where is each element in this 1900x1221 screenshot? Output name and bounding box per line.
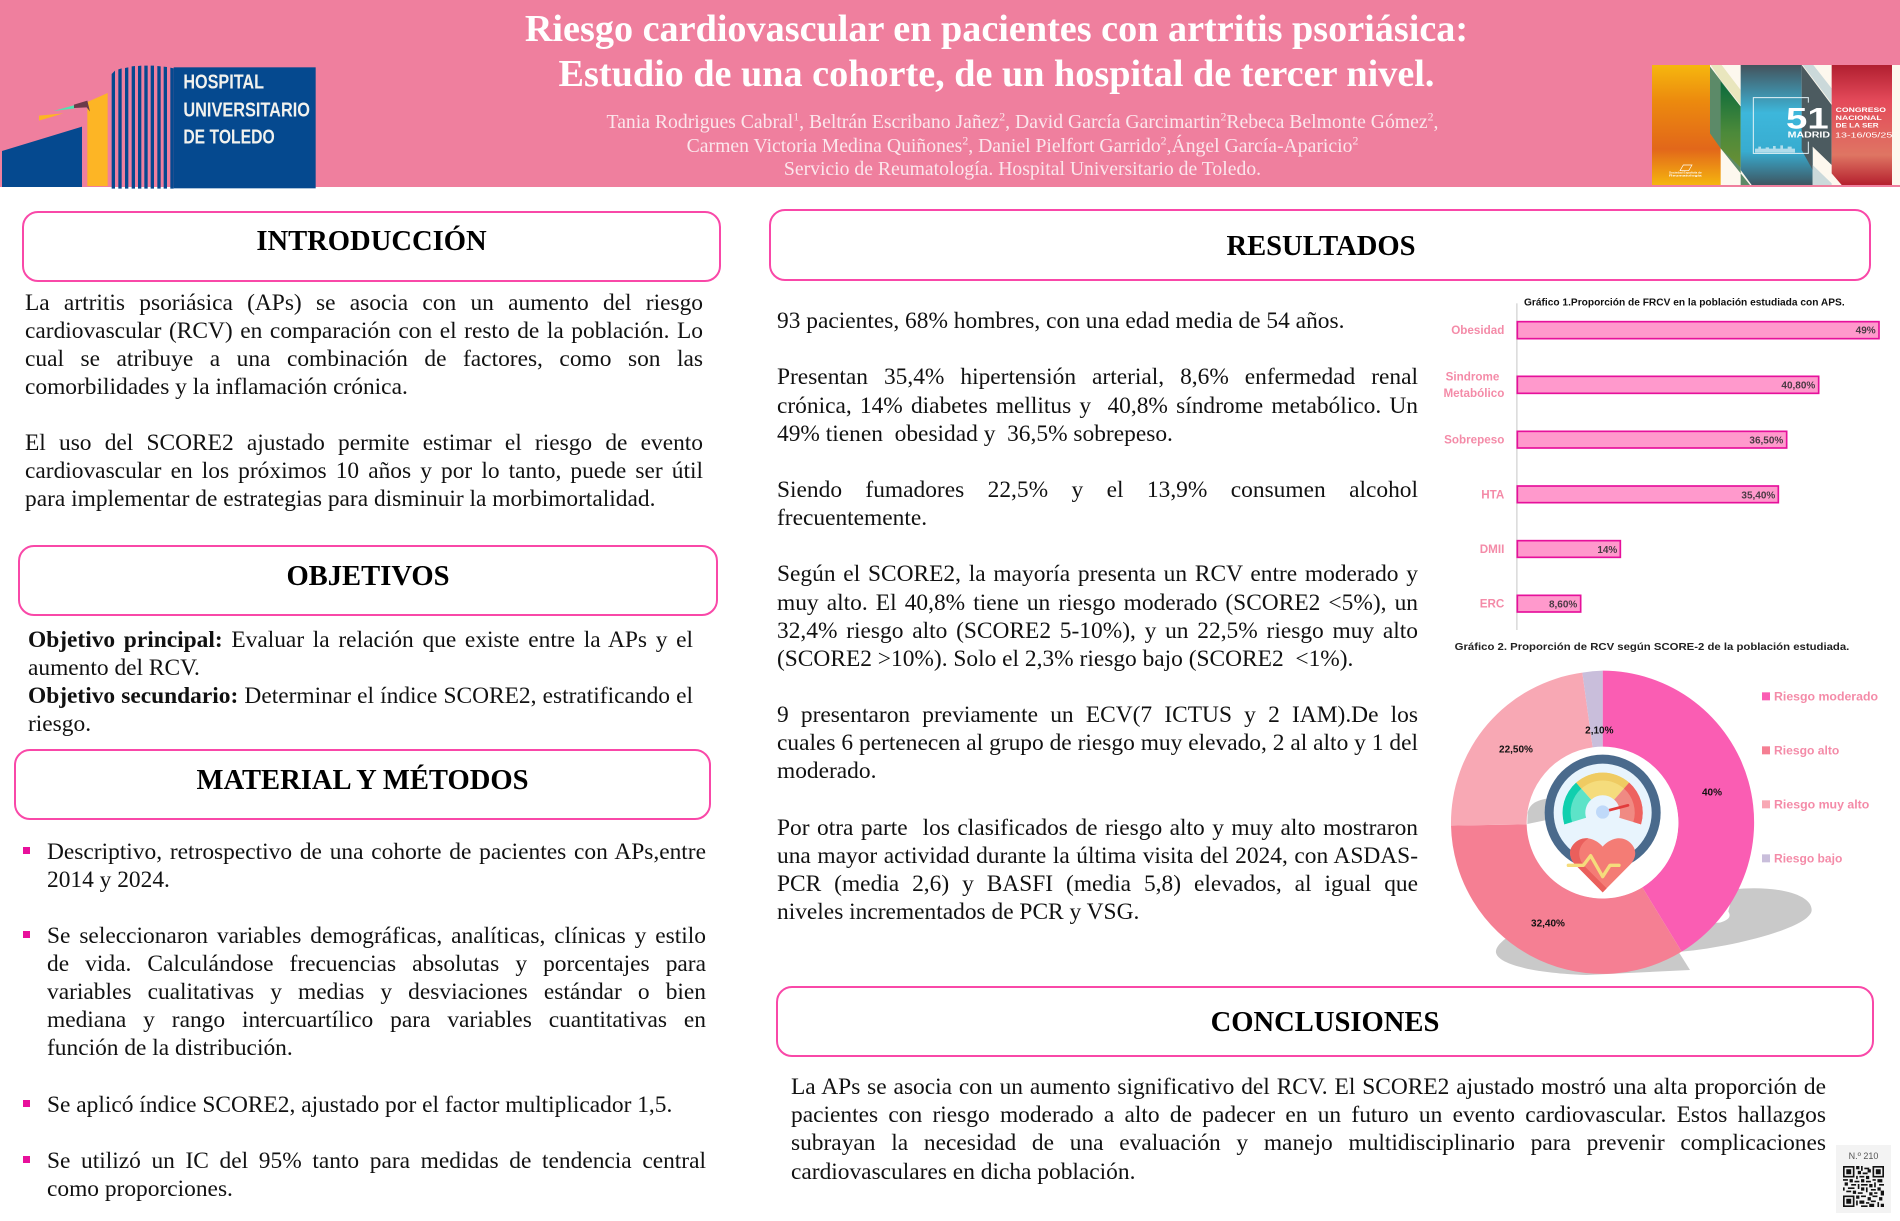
text block: resultados: (SCORE2 >10%). Solo el 2,3% riesgo bajo (SCORE2 <1%). <box>777 646 1353 672</box>
data labels: 40% <box>1702 788 1722 799</box>
data labels: 32,40% <box>1531 919 1565 930</box>
text block: material y métodos: Se seleccionaron variables demográficas, analíticas, clínicas y estilo <box>47 923 706 949</box>
heading: introducción <box>22 211 721 282</box>
bar chart: gráfico 1: ERC <box>1480 598 1505 611</box>
text block: conclusiones <box>791 1074 1826 1185</box>
text block: objetivos <box>28 626 693 737</box>
text block: resultados: una mayor actividad durante la última visita del 2024, con ASDAS- <box>777 843 1418 869</box>
text block: conclusiones: La APs se asocia con un aumento significativo del RCV. El SCORE2 ajustado mostró una alta proporción de <box>791 1074 1826 1100</box>
header band <box>0 0 1900 187</box>
title: Riesgo cardiovascular en pacientes con artritis psoriásica: <box>525 8 1468 50</box>
authors and affiliation: Carmen Victoria Medina Quiñones2, Daniel Pielfort Garrido2,Ángel García-Aparicio2 <box>687 133 1358 156</box>
heading: conclusiones: CONCLUSIONES <box>1211 1006 1439 1038</box>
legend <box>1762 691 1878 866</box>
bar chart: gráfico 1: 8,60% <box>1549 600 1577 611</box>
text block: resultados: moderado. <box>777 758 876 784</box>
text block: resultados: 32,4% riesgo alto (SCORE2 5-10%), y un 22,5% riesgo muy alto <box>777 618 1418 644</box>
text block: resultados <box>777 308 1418 925</box>
text block: resultados: cuales 6 pertenecen al grupo de riesgo muy elevado, 2 al alto y 1 del <box>777 730 1418 756</box>
bar chart: gráfico 1: DMII <box>1480 543 1504 556</box>
icon: congress banner: Reumatología <box>1669 174 1702 178</box>
text block: material y métodos: variables cualitativas y medias y desviaciones estándar o bien <box>47 979 706 1005</box>
text block: introducción: comorbilidades y la inflamación crónica. <box>25 374 408 400</box>
text block: objetivos: riesgo. <box>28 711 91 737</box>
data labels: 2,10% <box>1585 726 1614 737</box>
legend: Riesgo alto <box>1774 745 1839 758</box>
title <box>525 8 1468 95</box>
icon: congress banner: Sociedad Española de <box>1669 171 1703 174</box>
text block: material y métodos: de vida. Calculándose frecuencias absolutas y porcentajes para <box>47 951 706 977</box>
heading: objetivos <box>18 545 718 616</box>
text block: introducción: El uso del SCORE2 ajustado permite estimar el riesgo de evento <box>25 430 703 456</box>
text block: resultados: 9 presentaron previamente un ECV(7 ICTUS y 2 IAM).De los <box>777 702 1418 728</box>
heading: material y métodos <box>14 749 711 820</box>
legend: Riesgo bajo <box>1774 853 1842 866</box>
bar chart: gráfico 1: 36,50% <box>1749 435 1783 446</box>
authors and affiliation: Tania Rodrigues Cabral1, Beltrán Escribano Jañez2, David García Garcimartin2Rebeca Belmonte Gómez2, <box>607 109 1438 133</box>
text block: resultados: Según el SCORE2, la mayoría presenta un RCV entre moderado y <box>777 561 1418 587</box>
bar chart: gráfico 1: Metabólico <box>1443 387 1504 400</box>
text block: resultados: Por otra parte los clasificados de riesgo alto y muy alto mostraron <box>777 815 1418 841</box>
icon: congress banner: NACIONAL <box>1836 115 1882 122</box>
bar chart: gráfico 1 <box>1443 298 1880 630</box>
heading: conclusiones <box>776 986 1874 1057</box>
data labels <box>1499 726 1722 930</box>
shadow <box>1496 888 1812 975</box>
text block: objetivos: aumento del RCV. <box>28 655 200 681</box>
bullets: material y métodos <box>23 847 30 1163</box>
icon: congress banner: 51 <box>1786 102 1829 135</box>
bar chart: gráfico 1: Sindrome <box>1446 371 1500 384</box>
icon: hospital logo <box>2 66 316 189</box>
heading: resultados <box>769 209 1871 281</box>
text block: conclusiones: pacientes con riesgo moderado a alto de padecer en un futuro un evento cardiovascular. Estos hallazgos <box>791 1102 1826 1128</box>
icon: congress banner: MADRID <box>1788 131 1830 140</box>
text block: resultados: PCR (media 2,6) y BASFI (media 5,8) elevados, al igual que <box>777 871 1418 897</box>
icon: congress banner: 13-16/05/25 <box>1835 130 1892 139</box>
text block: material y métodos: 2014 y 2024. <box>47 867 170 893</box>
donut segments <box>1451 671 1754 974</box>
text block: resultados: Presentan 35,4% hipertensión arterial, 8,6% enfermedad renal <box>777 364 1418 390</box>
data labels: 22,50% <box>1499 745 1533 756</box>
icon: gauge and heart <box>1545 755 1661 892</box>
bar chart: gráfico 1: 35,40% <box>1741 490 1775 501</box>
authors and affiliation: Servicio de Reumatología. Hospital Universitario de Toledo. <box>784 158 1261 180</box>
text block: introducción: para implementar de estrategias para disminuir la morbimortalidad. <box>25 486 655 512</box>
text block: resultados: niveles incrementados de PCR y VSG. <box>777 899 1139 925</box>
bar chart: gráfico 1: HTA <box>1481 488 1505 501</box>
text block: resultados: 49% tienen obesidad y 36,5% sobrepeso. <box>777 421 1173 447</box>
heading: objetivos: OBJETIVOS <box>286 560 450 592</box>
text block: material y métodos: función de la distribución. <box>47 1035 293 1061</box>
title: Estudio de una cohorte, de un hospital de tercer nivel. <box>559 53 1434 95</box>
legend: Riesgo muy alto <box>1774 799 1869 812</box>
bar chart: gráfico 1: 40,80% <box>1781 381 1815 392</box>
text block: introducción <box>25 290 703 512</box>
text block: resultados: frecuentemente. <box>777 505 927 531</box>
text block: resultados: muy alto. El 40,8% tiene un riesgo moderado (SCORE2 <5%), un <box>777 590 1418 616</box>
bar chart: gráfico 1: 49% <box>1856 326 1876 337</box>
heading: introducción: INTRODUCCIÓN <box>256 226 487 257</box>
icon: QR code badge <box>1836 1145 1891 1213</box>
heading: material y métodos: MATERIAL Y MÉTODOS <box>196 764 529 796</box>
bar chart: gráfico 1: Sobrepeso <box>1444 434 1504 447</box>
text block: introducción: cual se atribuye a una combinación de factores, como son las <box>25 346 703 372</box>
donut chart: gráfico 2 <box>1451 642 1878 975</box>
text block: conclusiones: subrayan la necesidad de una evaluación y manejo multidisciplinario para prevenir complicaciones <box>791 1130 1826 1156</box>
text block: resultados: Siendo fumadores 22,5% y el 13,9% consumen alcohol <box>777 477 1418 503</box>
text block: material y métodos: mediana y rango intercuartílico para variables cuantitativas en <box>47 1007 706 1033</box>
text block: resultados: 93 pacientes, 68% hombres, con una edad media de 54 años. <box>777 308 1344 334</box>
icon: congress banner: CONGRESO <box>1836 107 1886 114</box>
icon: hospital logo: DE TOLEDO <box>183 127 275 149</box>
icon: congress banner <box>1652 65 1900 185</box>
chart title: Gráfico 1.Proporción de FRCV en la población estudiada con APS. <box>1524 298 1845 309</box>
bar chart: gráfico 1: Obesidad <box>1451 324 1504 337</box>
text block: material y métodos <box>47 838 706 1202</box>
text block: objetivos: Objetivo principal: Evaluar la relación que existe entre la APs y el <box>28 626 693 652</box>
text block: resultados: crónica, 14% diabetes mellitus y 40,8% síndrome metabólico. Un <box>777 393 1418 419</box>
text block: material y métodos: Descriptivo, retrospectivo de una cohorte de pacientes con APs,entre <box>47 838 706 864</box>
text block: material y métodos: Se utilizó un IC del 95% tanto para medidas de tendencia central <box>47 1148 706 1174</box>
text block: conclusiones: cardiovasculares en dicha población. <box>791 1159 1135 1185</box>
bar chart: gráfico 1: 14% <box>1597 545 1617 556</box>
icon: congress banner: DE LA SER <box>1836 123 1879 130</box>
heading: resultados: RESULTADOS <box>1226 230 1416 262</box>
text block: introducción: La artritis psoriásica (APs) se asocia con un aumento del riesgo <box>25 290 703 316</box>
icon: QR code badge: N.º 210 <box>1849 1151 1878 1161</box>
text block: objetivos: Objetivo secundario: Determinar el índice SCORE2, estratificando el <box>28 683 693 709</box>
text block: material y métodos: Se aplicó índice SCORE2, ajustado por el factor multiplicador 1,5. <box>47 1092 672 1118</box>
legend: Riesgo moderado <box>1774 691 1878 704</box>
text block: material y métodos: como proporciones. <box>47 1176 233 1202</box>
icon: hospital logo: HOSPITAL <box>183 72 264 94</box>
chart title: Gráfico 2. Proporción de RCV según SCORE-2 de la población estudiada. <box>1455 642 1849 653</box>
authors and affiliation <box>606 109 1438 180</box>
text block: introducción: cardiovascular en los próximos 10 años y por lo tanto, puede ser útil <box>25 458 703 484</box>
text block: introducción: cardiovascular (RCV) en comparación con el resto de la población. Lo <box>25 318 703 344</box>
